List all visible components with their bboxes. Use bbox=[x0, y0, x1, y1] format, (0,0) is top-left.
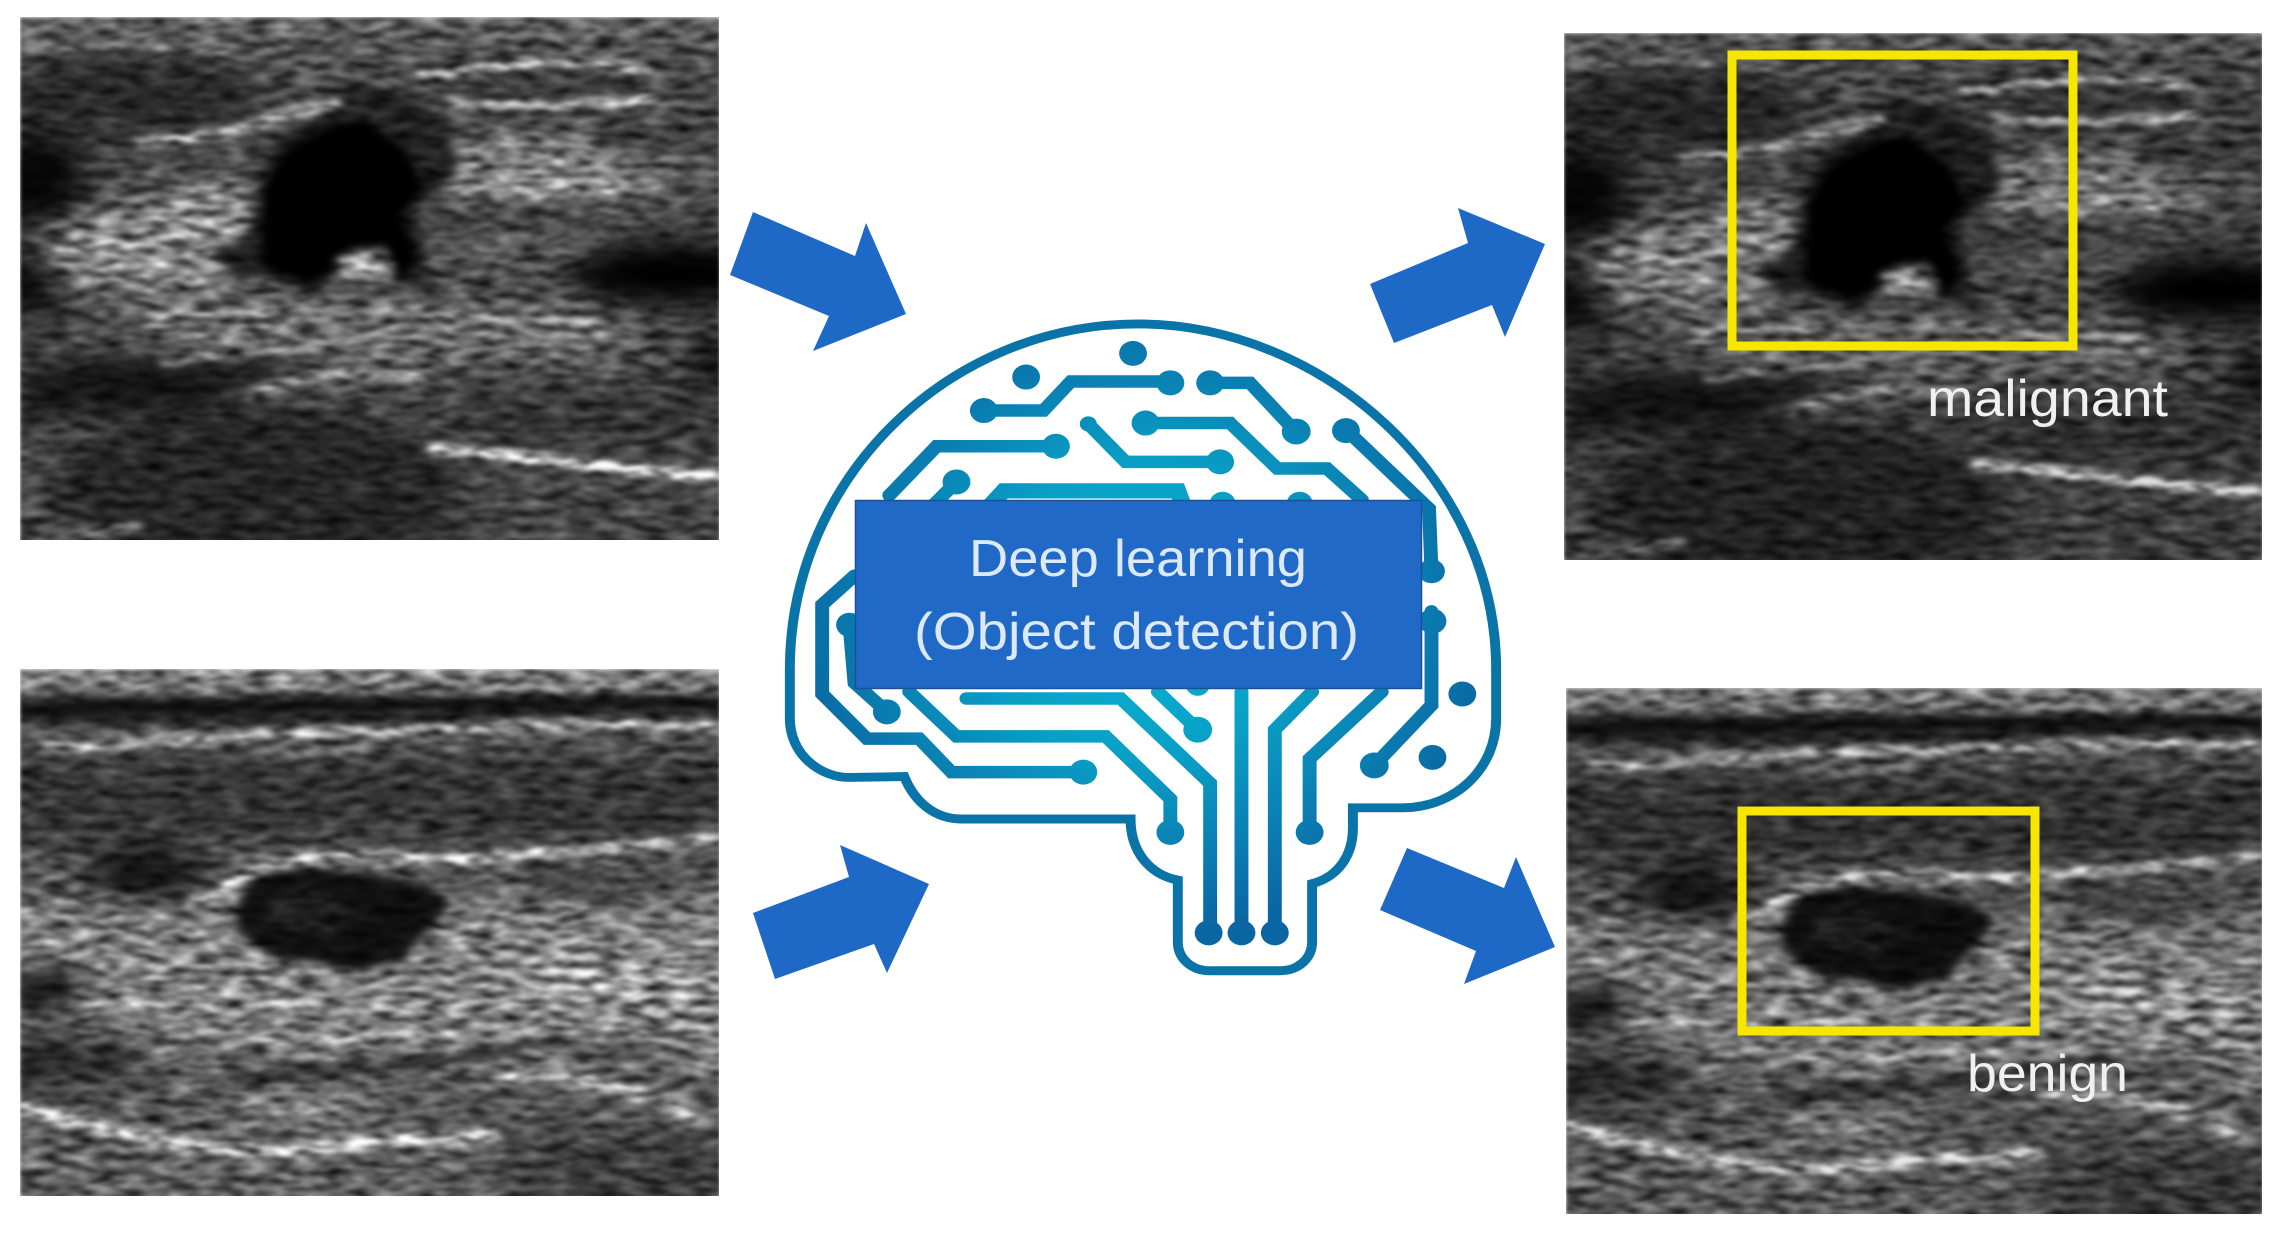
arrow: bottom-right network to output bbox=[1380, 848, 1555, 984]
panel: detection output, benign bbox=[1499, 634, 2281, 1236]
callout text line 1: Deep learning bbox=[969, 530, 1307, 588]
circuit nodes bbox=[836, 341, 1476, 945]
label: benign: benign bbox=[1967, 1045, 2128, 1103]
callout box bbox=[856, 500, 1422, 688]
arrow: bottom-left input to network bbox=[753, 845, 929, 979]
yellow bounding box bbox=[1742, 811, 2035, 1031]
yellow bounding box bbox=[1732, 55, 2073, 346]
ultrasound image with benign lesion bbox=[1566, 688, 2262, 1214]
callout: Deep learning (Object detection) bbox=[856, 500, 1422, 688]
panel: input ultrasound image, malignant lesion bbox=[20, 17, 719, 540]
panel: detection output, malignant bbox=[1497, 0, 2281, 626]
arrow: top-right network to output bbox=[1370, 208, 1545, 343]
brain outline bbox=[790, 324, 1496, 971]
ultrasound image with malignant lesion bbox=[1564, 33, 2262, 560]
icon: circuit-board brain bbox=[790, 324, 1496, 971]
arrow: top-left input to network bbox=[730, 212, 906, 351]
callout text line 2: (Object detection) bbox=[914, 603, 1359, 661]
circuit traces bbox=[822, 382, 1431, 933]
label: malignant: malignant bbox=[1927, 370, 2169, 428]
panel: input ultrasound image, benign lesion bbox=[20, 669, 719, 1196]
